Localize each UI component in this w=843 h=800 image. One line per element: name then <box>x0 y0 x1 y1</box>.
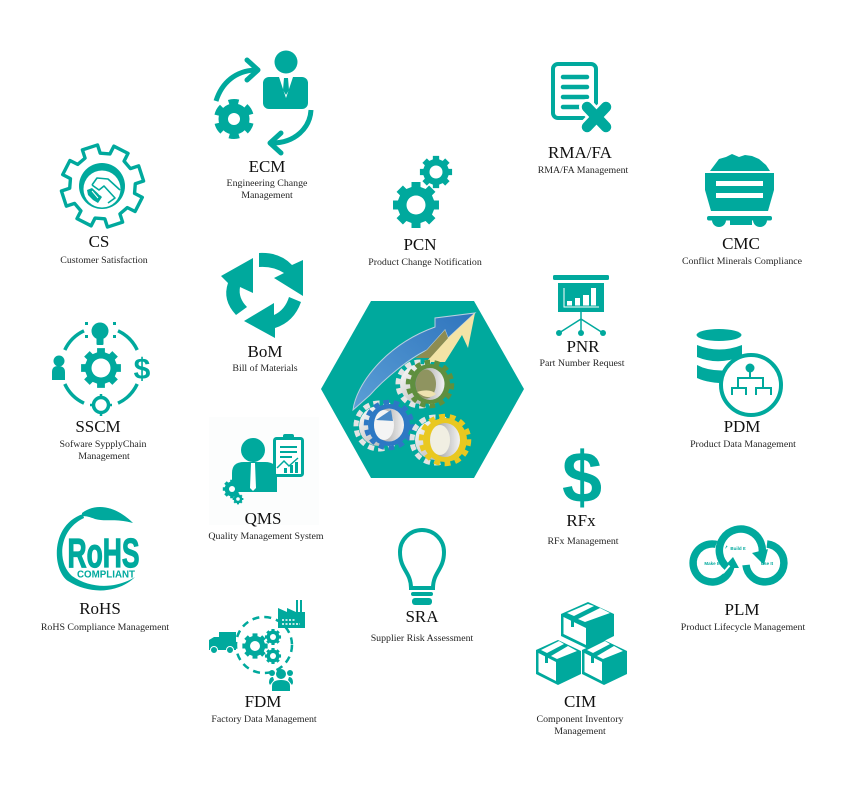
icon: mine cart <box>705 154 774 227</box>
icon: light bulb <box>400 530 444 605</box>
heading: FDM <box>245 692 281 711</box>
heading: CS <box>89 232 109 251</box>
heading: SRA <box>405 607 439 626</box>
module: RFx <box>547 438 619 547</box>
module: FDM <box>209 600 317 725</box>
module: PCN <box>368 156 482 268</box>
description: Factory Data Management <box>211 714 317 725</box>
heading: ECM <box>249 157 285 176</box>
module: ECM <box>216 50 311 201</box>
icon: plan build use cycle: Use It <box>761 561 774 566</box>
icon: person with change arrows <box>216 50 311 153</box>
icon: RoHS compliant logo: COMPLIANT <box>77 568 136 580</box>
description: Management <box>241 190 293 201</box>
description: Component Inventory <box>537 714 624 725</box>
module: CS <box>51 135 154 266</box>
description: Bill of Materials <box>232 363 298 374</box>
icon: recycling arrows <box>221 253 303 338</box>
heading: RoHS <box>79 599 121 618</box>
heading: QMS <box>245 509 281 528</box>
heading: SSCM <box>75 417 121 436</box>
module: PDM <box>690 329 796 450</box>
description: RoHS Compliance Management <box>41 622 169 633</box>
description: Management <box>554 726 606 737</box>
description: RMA/FA Management <box>538 165 629 176</box>
icon: two gears <box>393 156 452 228</box>
icon: stacked boxes <box>536 602 627 685</box>
icon: person with clipboard <box>209 417 319 525</box>
description: RFx Management <box>547 536 619 547</box>
green gear <box>398 362 452 406</box>
central hexagon <box>321 301 524 478</box>
icon: RoHS compliant logo: RoHS <box>68 530 140 576</box>
icon: presentation board <box>553 275 609 336</box>
icon: dollar sign: $ <box>562 438 602 518</box>
description: Product Lifecycle Management <box>681 622 805 633</box>
heading: CMC <box>722 234 760 253</box>
module: SSCM <box>52 322 151 462</box>
module: PLM <box>681 529 805 633</box>
description: Product Change Notification <box>368 257 482 268</box>
heading: PLM <box>725 600 759 619</box>
description: Management <box>78 451 130 462</box>
description: Quality Management System <box>208 531 324 542</box>
module: BoM <box>221 253 303 374</box>
blue gear <box>356 402 412 449</box>
icon: gear with handshake <box>51 135 154 237</box>
module: QMS <box>208 417 324 542</box>
description: Customer Satisfaction <box>60 255 148 266</box>
description: Sofware SypplyChain <box>60 439 147 450</box>
icon: document with X <box>553 64 606 127</box>
module: SRA <box>371 530 474 644</box>
heading: PCN <box>403 235 437 254</box>
heading: BoM <box>248 342 282 361</box>
module: CMC <box>682 154 803 267</box>
icon: database with hierarchy <box>696 329 781 415</box>
icon: factory truck people with gears <box>209 600 305 691</box>
heading: RFx <box>566 511 596 530</box>
icon: supply chain ring: $ <box>134 353 151 386</box>
module: RoHS <box>41 507 169 633</box>
module: CIM <box>536 602 627 737</box>
icon: plan build use cycle <box>693 529 784 582</box>
description: Part Number Request <box>539 358 625 369</box>
module: RMA/FA <box>538 64 629 176</box>
heading: PDM <box>724 417 760 436</box>
description: Engineering Change <box>227 178 308 189</box>
heading: CIM <box>564 692 596 711</box>
icon: plan build use cycle: Build It <box>730 546 746 551</box>
description: Product Data Management <box>690 439 796 450</box>
growth arrow <box>353 313 475 410</box>
heading: RMA/FA <box>548 143 613 162</box>
description: Supplier Risk Assessment <box>371 633 474 644</box>
module: PNR <box>539 275 625 369</box>
icon: plan build use cycle: Make It <box>704 561 720 566</box>
heading: PNR <box>566 337 600 356</box>
icon: RoHS compliant logo <box>57 507 139 590</box>
yellow gear <box>412 416 469 464</box>
description: Conflict Minerals Compliance <box>682 256 803 267</box>
